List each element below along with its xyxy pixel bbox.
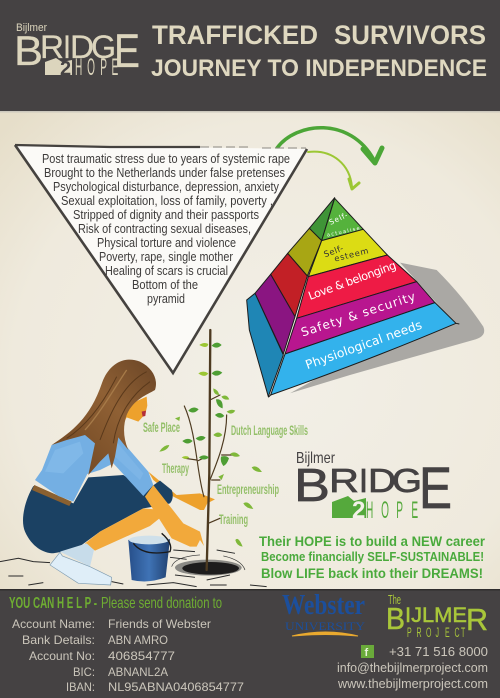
level: safety and security: Safety & security [299, 289, 417, 339]
left faces [247, 198, 335, 397]
triangle text: Physical torture and violence [97, 236, 236, 250]
triangle text [42, 152, 290, 306]
level: self-esteem: esteem [333, 245, 369, 264]
tree [184, 330, 233, 570]
level: self-actualisation [322, 198, 363, 241]
triangle text: Poverty, rape, single mother [99, 250, 233, 264]
level: self-esteem [308, 229, 387, 277]
header logo: HOPE [75, 53, 118, 80]
Webster University logo [282, 590, 365, 636]
triangle text: Post traumatic stress due to years of systemic rape [42, 152, 290, 166]
header logo: D [70, 29, 94, 65]
header logo: Bijlmer [16, 22, 47, 34]
account details: ABN AMRO [108, 633, 168, 647]
level: love and belonging: Love & belonging [306, 258, 398, 303]
contact details [337, 645, 488, 691]
far arm [148, 472, 215, 510]
paper background [0, 112, 500, 590]
header logo [14, 22, 140, 80]
icon: facebook [361, 645, 374, 659]
account details: Bank Details: [22, 633, 95, 647]
pyramid shadow [290, 263, 484, 393]
level: physiological needs: Physiological needs [304, 318, 424, 372]
account details: NL95ABNA0406854777 [108, 680, 244, 694]
hair [52, 360, 156, 475]
woman planting tree [0, 330, 267, 587]
face and neck [113, 397, 147, 437]
header logo: E [114, 24, 140, 77]
tree leaves [159, 343, 262, 547]
contact details: +31 71 516 8000 [389, 645, 488, 659]
contact details: www.thebijlmerproject.com [337, 677, 488, 691]
header logo: B [14, 27, 43, 74]
hope message: Become financially SELF-SUSTAINABLE! [261, 550, 484, 564]
ground lines [0, 550, 267, 587]
Bijlmer Project logo: B [386, 601, 405, 636]
contact details: info@thebijlmerproject.com [337, 661, 488, 675]
inverted triangle panel [15, 145, 307, 373]
triangle text: Bottom of the [132, 278, 198, 292]
level: self-actualisation: actualise [326, 226, 360, 239]
Bridge 2 Hope logo: I [359, 462, 368, 499]
footer band [0, 589, 500, 698]
account details: Account No: [29, 649, 95, 663]
Bridge 2 Hope logo [294, 450, 452, 524]
triangle text: Stripped of dignity and their passports [73, 208, 259, 222]
shoe and sock [50, 543, 112, 585]
account details [12, 617, 244, 694]
triangle text: pyramid [147, 292, 185, 306]
account details: IBAN: [66, 680, 95, 694]
title: TRAFFICKED [152, 20, 318, 50]
Bridge 2 Hope logo: 2 [352, 497, 365, 524]
icon: facebook: f [364, 647, 368, 659]
level: safety and security [285, 282, 435, 354]
hope message: Blow LIFE back into their DREAMS! [261, 566, 483, 581]
header logo: I [63, 29, 71, 65]
donation heading: YOU CAN H E L P - [9, 595, 97, 612]
level: self-actualisation: Self- [328, 210, 349, 227]
triangle text: Healing of scars is crucial [105, 264, 228, 278]
triangle text: Brought to the Netherlands under false pretenses [44, 166, 285, 180]
Bridge 2 Hope logo: R [329, 462, 359, 499]
Bridge 2 Hope logo: Bijlmer [296, 450, 336, 467]
shirt [35, 428, 153, 502]
planting hole [172, 555, 245, 576]
hope message [259, 534, 486, 581]
tree labels: Dutch Language Skills [231, 422, 308, 438]
level: love and belonging [297, 255, 417, 318]
Webster University logo: Webster [282, 590, 365, 621]
account details: Friends of Webster [108, 617, 211, 631]
account details: Account Name: [12, 617, 95, 631]
header logo: G [91, 29, 116, 65]
Bridge 2 Hope logo: B [294, 459, 330, 511]
belt [32, 485, 72, 506]
Bijlmer Project logo: The [388, 592, 401, 607]
title [151, 20, 487, 82]
tree labels [143, 419, 308, 527]
Webster University logo: UNIVERSITY [285, 619, 365, 633]
pyramid [247, 198, 484, 397]
triangle text: Sexual exploitation, loss of family, poverty , [61, 194, 273, 208]
triangle text: Risk of contracting sexual diseases, [78, 222, 251, 236]
bucket [128, 533, 171, 581]
donation heading: Please send donation to [101, 595, 222, 612]
Bridge 2 Hope logo: E [419, 456, 452, 521]
Bridge 2 Hope logo: D [368, 462, 396, 499]
tree labels: Safe Place [143, 419, 180, 435]
tree labels: Entrepreneurship [217, 481, 279, 497]
Bijlmer Project logo: IJLME [405, 604, 467, 627]
account details: ABNANL2A [108, 665, 168, 679]
tree labels: Training [219, 511, 248, 527]
tree labels: Therapy [162, 460, 189, 476]
green arrow: large [277, 128, 382, 163]
Bijlmer Project logo: PROJECT [407, 626, 465, 641]
green arrow: small [308, 152, 359, 189]
Bijlmer Project logo: R [466, 602, 488, 637]
near arm [145, 485, 204, 547]
jeans [23, 475, 173, 553]
donation heading [9, 595, 222, 612]
triangle text: Psychological disturbance, depression, anxiety [53, 180, 280, 194]
header logo: R [40, 29, 64, 65]
level: self-esteem: Self- [322, 243, 344, 259]
account details: BIC: [73, 665, 95, 679]
level: physiological needs [271, 303, 456, 395]
header logo: 2 [60, 58, 71, 80]
account details: 406854777 [108, 649, 175, 663]
title: SURVIVORS [334, 20, 486, 50]
lower leg [85, 508, 162, 551]
Bridge 2 Hope logo: G [392, 462, 422, 499]
hope message: Their HOPE is to build a NEW career [259, 534, 486, 549]
title: JOURNEY TO INDEPENDENCE [151, 55, 487, 82]
header band [0, 0, 500, 112]
Bijlmer Project logo [386, 592, 488, 641]
Bridge 2 Hope logo: HOPE [366, 496, 418, 523]
